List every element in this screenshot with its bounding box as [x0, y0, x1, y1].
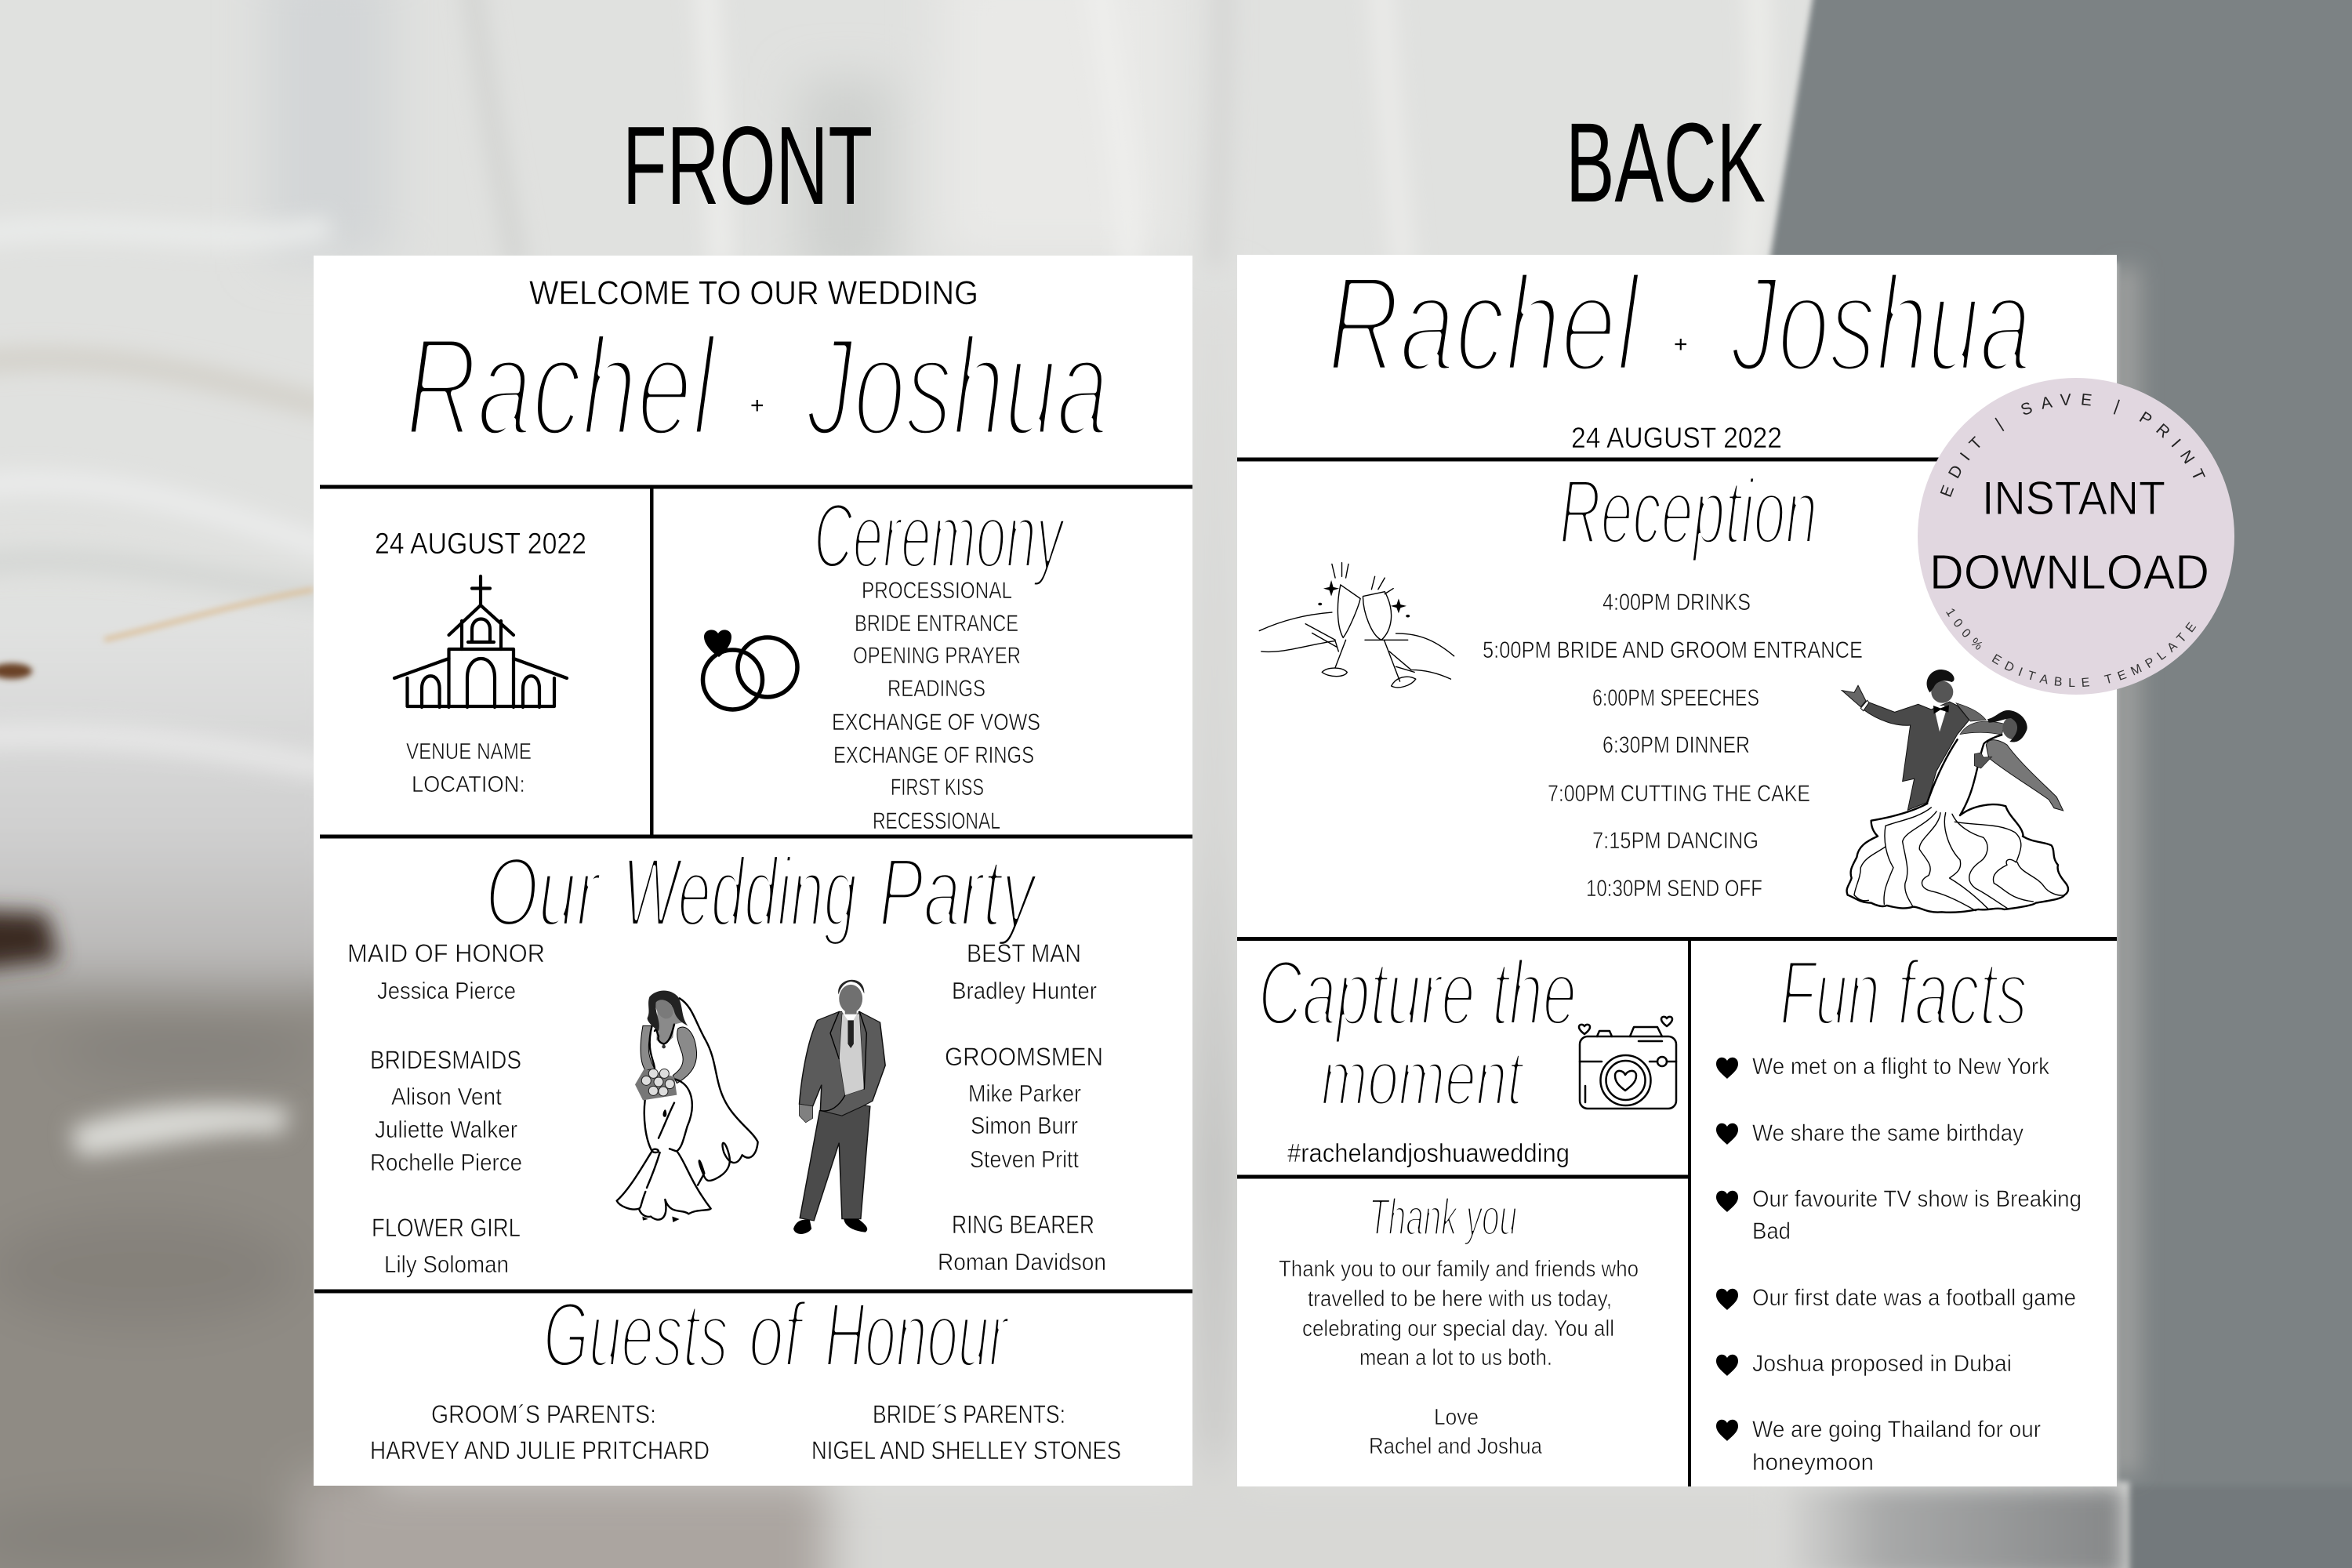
groom's side list: Steven Pritt: [970, 1145, 1079, 1173]
wedding party heading script: [485, 838, 1038, 947]
fun facts list with heart bullets: [1716, 1054, 2082, 1475]
heading: FRONT: FRONT: [622, 103, 873, 228]
ceremony order list: READINGS: [887, 676, 985, 702]
parents names: [370, 1400, 1121, 1465]
thank you message: Rachel and Joshua: [1369, 1434, 1543, 1459]
reception schedule: [1483, 590, 1863, 902]
groom's side list: Bradley Hunter: [952, 977, 1097, 1004]
ceremony heading script: Ceremony: [814, 485, 1066, 588]
badge main text: [1929, 472, 2209, 600]
illustration: dancing couple: [1842, 670, 2068, 913]
couple names script: [405, 308, 1109, 466]
fun facts list with heart bullets: We share the same birthday: [1752, 1120, 2024, 1146]
guests of honour heading script: [543, 1283, 1010, 1387]
bride's side list: [347, 939, 545, 1278]
thank you message: Love: [1434, 1405, 1479, 1430]
venue text: LOCATION:: [412, 772, 525, 797]
fun facts list with heart bullets: Our favourite TV show is Breaking: [1752, 1186, 2082, 1212]
bride's side list: Juliette Walker: [375, 1116, 517, 1143]
fun facts list with heart bullets: Our first date was a football game: [1752, 1285, 2076, 1311]
reception schedule: 6:00PM SPEECHES: [1592, 685, 1759, 711]
ceremony order list: BRIDE ENTRANCE: [855, 611, 1018, 637]
wedding party heading script: Wedding: [622, 838, 857, 947]
couple names script: Rachel: [1327, 248, 1641, 401]
bride's side list: BRIDESMAIDS: [370, 1046, 521, 1074]
ceremony order list: OPENING PRAYER: [853, 643, 1021, 669]
fun facts list with heart bullets: honeymoon: [1752, 1450, 1874, 1475]
thank you message: travelled to be here with us today,: [1308, 1287, 1612, 1312]
ceremony order list: EXCHANGE OF VOWS: [832, 710, 1040, 735]
ceremony order list: RECESSIONAL: [873, 808, 1000, 834]
reception heading script: Reception: [1559, 460, 1817, 564]
couple names script: +: [750, 393, 764, 419]
badge: instant download: [1918, 378, 2234, 695]
fun facts list with heart bullets: Bad: [1752, 1218, 1791, 1244]
parents names: NIGEL AND SHELLEY STONES: [811, 1436, 1121, 1465]
date: 24 AUGUST 2022: [1571, 422, 1782, 454]
parents names: BRIDE´S PARENTS:: [873, 1400, 1065, 1428]
icon: church: [394, 576, 567, 707]
reception schedule: 7:15PM DANCING: [1592, 828, 1759, 854]
groom's side list: Mike Parker: [968, 1080, 1081, 1107]
guests of honour heading script: Guests: [543, 1283, 728, 1387]
guests of honour heading script: Honour: [825, 1283, 1010, 1387]
couple names script: Joshua: [1730, 248, 2031, 401]
couple names script: [1327, 248, 2031, 401]
wedding party heading script: Our: [485, 838, 601, 947]
hashtag: #rachelandjoshuawedding: [1287, 1138, 1570, 1167]
couple names script: +: [1674, 332, 1688, 358]
fun facts heading script: [1780, 942, 2027, 1045]
bride's side list: Lily Soloman: [384, 1250, 509, 1278]
welcome line: WELCOME TO OUR WEDDING: [529, 274, 978, 312]
thank you message: Thank you to our family and friends who: [1279, 1257, 1639, 1282]
guests of honour heading script: of: [749, 1283, 807, 1387]
fun facts list with heart bullets: We are going Thailand for our: [1752, 1417, 2041, 1443]
icon: champagne toast: [1259, 563, 1454, 688]
bride's side list: Alison Vent: [391, 1083, 502, 1110]
groom's side list: GROOMSMEN: [945, 1043, 1103, 1071]
parents names: HARVEY AND JULIE PRITCHARD: [370, 1436, 710, 1465]
badge main text: INSTANT: [1982, 472, 2165, 524]
groom's side list: RING BEARER: [952, 1210, 1094, 1239]
capture the moment heading script: [1258, 942, 1577, 1122]
wedding party heading script: Party: [879, 838, 1038, 947]
badge curved top text: EDIT | SAVE | PRINT: [1940, 394, 2205, 497]
thank you message: [1279, 1257, 1639, 1459]
groom's side list: Simon Burr: [971, 1112, 1078, 1139]
bride's side list: Rochelle Pierce: [370, 1149, 522, 1176]
ceremony order list: PROCESSIONAL: [862, 578, 1012, 604]
fun facts list with heart bullets: We met on a flight to New York: [1752, 1054, 2050, 1080]
heading: BACK: BACK: [1566, 100, 1766, 226]
groom's side list: Roman Davidson: [938, 1248, 1106, 1276]
capture the moment heading script: moment: [1321, 1034, 1525, 1122]
reception schedule: 7:00PM CUTTING THE CAKE: [1548, 781, 1810, 807]
fun facts heading script: facts: [1897, 942, 2027, 1045]
venue text: VENUE NAME: [406, 739, 532, 764]
illustration: bride: [617, 991, 758, 1222]
parents names: GROOM´S PARENTS:: [431, 1400, 656, 1428]
illustration: groom: [793, 980, 885, 1234]
bride's side list: FLOWER GIRL: [372, 1214, 521, 1242]
reception schedule: 10:30PM SEND OFF: [1586, 876, 1762, 902]
icon: camera: [1579, 1017, 1676, 1109]
fun facts list with heart bullets: Joshua proposed in Dubai: [1752, 1351, 2012, 1377]
groom's side list: [938, 939, 1106, 1276]
ceremony order list: EXCHANGE OF RINGS: [833, 742, 1034, 768]
reception schedule: 5:00PM BRIDE AND GROOM ENTRANCE: [1483, 637, 1863, 663]
fun facts heading script: Fun: [1780, 942, 1880, 1045]
venue text: [406, 739, 532, 797]
couple names script: Rachel: [405, 308, 717, 466]
groom's side list: BEST MAN: [967, 939, 1081, 967]
badge curved bottom text: 100% EDITABLE TEMPLATE: [1946, 608, 2197, 687]
panel: front card: [314, 256, 1192, 1486]
bride's side list: Jessica Pierce: [377, 977, 516, 1004]
bride's side list: MAID OF HONOR: [347, 939, 545, 967]
thank you message: mean a lot to us both.: [1359, 1345, 1552, 1370]
panel: back card: [1237, 248, 2117, 1486]
reception schedule: 6:30PM DINNER: [1602, 732, 1750, 758]
couple names script: Joshua: [806, 308, 1109, 466]
badge main text: DOWNLOAD: [1929, 546, 2209, 600]
ceremony order list: [832, 578, 1040, 834]
date: 24 AUGUST 2022: [375, 528, 586, 561]
reception schedule: 4:00PM DRINKS: [1602, 590, 1751, 615]
ceremony order list: FIRST KISS: [891, 775, 984, 800]
capture the moment heading script: Capture the: [1258, 942, 1577, 1045]
thank you message: celebrating our special day. You all: [1302, 1316, 1614, 1341]
icon: wedding rings: [702, 630, 797, 710]
thank you heading script: Thank you: [1369, 1188, 1517, 1246]
